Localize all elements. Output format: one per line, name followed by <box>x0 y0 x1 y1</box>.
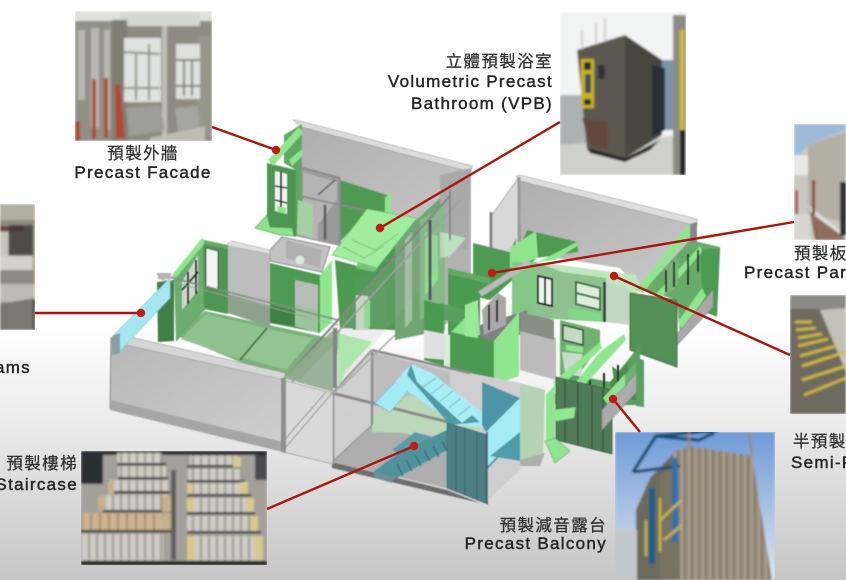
side strip of walls near the bathroom <box>395 198 445 340</box>
photo: semi-precast slab <box>790 295 846 414</box>
staircase core walls <box>447 382 520 505</box>
leader lines <box>35 122 794 509</box>
label: precast balcony: 預製減音露台 <box>500 516 607 535</box>
precast facade model <box>255 124 313 238</box>
lower staircase <box>373 430 447 483</box>
label: volumetric precast bathroom: Bathroom (VPB) <box>411 94 553 113</box>
3D building model <box>110 120 720 505</box>
rear wall, right block <box>491 175 697 290</box>
middle gray wall <box>228 243 270 327</box>
right window strip panel <box>560 320 600 380</box>
green wall with door <box>270 260 332 333</box>
left green room walls <box>157 238 228 342</box>
partition inner walls <box>424 300 519 385</box>
photo: precast balcony <box>615 430 775 580</box>
upper dark green room <box>340 180 390 242</box>
label: precast partition wall <box>744 244 846 282</box>
label: precast facade: Precast Facade <box>74 163 212 182</box>
photo: precast beams <box>0 204 35 330</box>
label: precast staircase: 預製樓梯 <box>6 454 78 473</box>
label: precast balcony <box>465 516 607 553</box>
right facade panel with windows <box>630 222 720 367</box>
leader end dots <box>137 146 618 450</box>
central gray wall <box>520 330 556 380</box>
precast slab floor <box>178 311 338 380</box>
small upper room <box>295 165 340 246</box>
middle room gray box <box>270 237 330 272</box>
rear wall, upper block <box>293 120 472 330</box>
label: semi-precast slab <box>791 432 846 472</box>
photo: precast staircases <box>81 451 267 565</box>
photo: precast partition wall <box>794 124 846 240</box>
label: volumetric precast bathroom: 立體預製浴室 <box>446 52 553 71</box>
right stack of stairs <box>187 456 263 560</box>
lower right facade and balcony <box>520 334 644 466</box>
photo: precast facade <box>75 11 212 141</box>
stair room <box>332 350 520 503</box>
bathroom lower walls <box>335 240 395 330</box>
front gray walls <box>110 328 395 464</box>
label: volumetric precast bathroom: Volumetric Precast <box>388 72 553 91</box>
central transparent wall <box>157 190 460 392</box>
right interior walls <box>424 230 640 366</box>
blue precast beam <box>112 273 171 355</box>
volumetric bathroom top <box>332 209 417 272</box>
label: volumetric precast bathroom <box>388 52 553 113</box>
upper staircase <box>375 364 490 428</box>
label: precast staircase <box>0 454 78 494</box>
label: precast balcony: Precast Balcony <box>465 534 607 553</box>
label: precast facade <box>74 144 212 182</box>
label: precast facade: 預製外牆 <box>107 144 179 163</box>
left stack of stairs <box>81 453 172 560</box>
beam lines upper room <box>296 166 372 245</box>
photo: volumetric precast bathroom <box>560 12 686 175</box>
